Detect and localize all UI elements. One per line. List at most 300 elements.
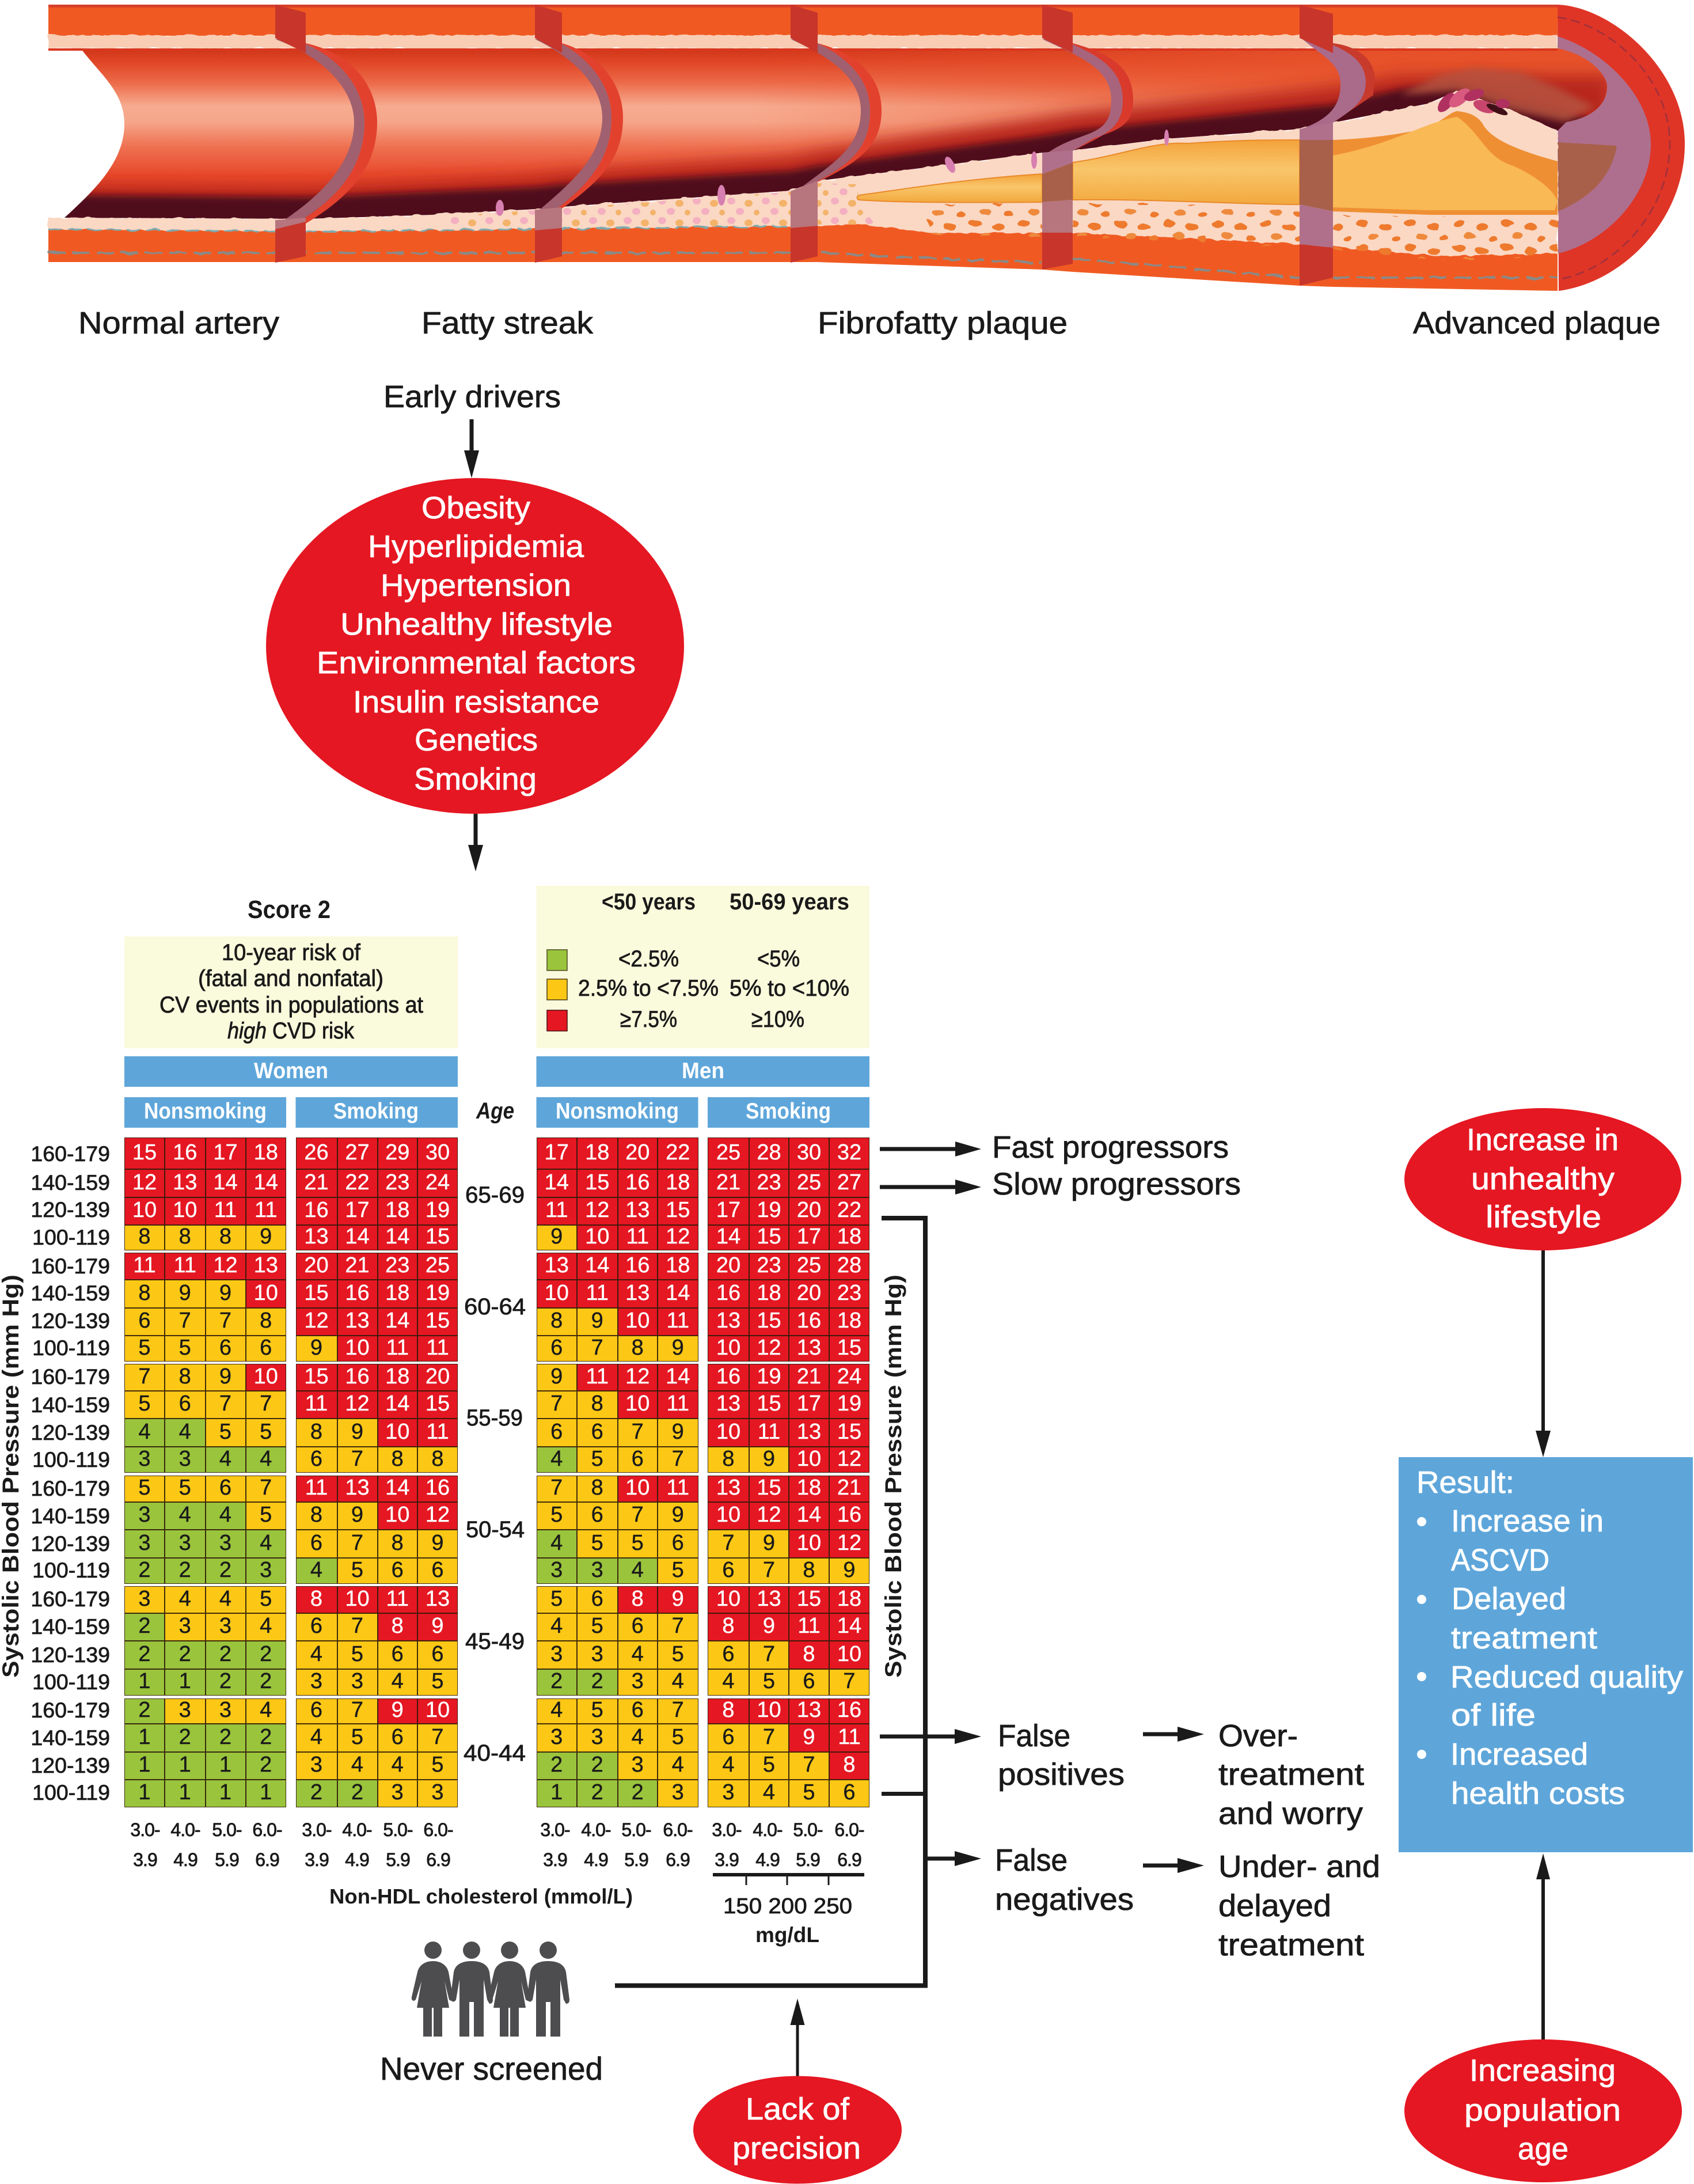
grid: men nonsmoking 65-69: 15: [585, 1170, 609, 1195]
grid: women nonsmoking 50-54: [124, 1476, 286, 1584]
age band labels: 60-64: [464, 1294, 526, 1320]
grid: women nonsmoking 40-44: 3: [219, 1698, 231, 1722]
grid: men smoking 55-59: 15: [837, 1419, 861, 1443]
heading: early drivers: Early drivers: [383, 380, 561, 414]
label: overtreatment and worry: and worry: [1218, 1796, 1363, 1831]
grid: women smoking 40-44: 4: [351, 1753, 363, 1777]
grid: men nonsmoking 40-44: 3: [550, 1724, 563, 1749]
grid: women smoking 40-44: 2: [310, 1780, 322, 1804]
ellipse: early drivers list: Genetics: [415, 723, 538, 757]
grid: women nonsmoking 60-64: 6: [260, 1335, 272, 1359]
grid: men nonsmoking 40-44: 3: [591, 1724, 603, 1749]
grid: men nonsmoking 50-54: 11: [667, 1476, 689, 1500]
grid: women smoking 50-54: 5: [351, 1557, 363, 1582]
grid: men smoking 65-69: 22: [837, 1198, 861, 1222]
header: men nonsmoking: [537, 1097, 698, 1128]
grid: women smoking 40-44: [296, 1698, 458, 1807]
grid: women smoking 60-64: 9: [310, 1335, 322, 1359]
grid: women nonsmoking 50-54: 3: [219, 1531, 231, 1555]
blood pressure row labels: 140-159: [31, 1726, 110, 1750]
grid: men nonsmoking 40-44: 3: [672, 1780, 684, 1804]
grid: women nonsmoking 40-44: 1: [260, 1780, 272, 1804]
grid: men smoking 60-64: 15: [837, 1335, 861, 1359]
grid: men nonsmoking 65-69: [537, 1138, 698, 1250]
grid: men smoking 55-59: 19: [757, 1364, 781, 1388]
ellipse: lack of precision: precision: [732, 2131, 861, 2166]
ellipse: early drivers list: Unhealthy lifestyle: [340, 607, 613, 642]
grid: women nonsmoking 60-64: 5: [138, 1335, 151, 1359]
cholesterol axis labels: 3.9: [715, 1849, 739, 1870]
grid: men nonsmoking 45-49: 3: [550, 1641, 563, 1666]
ellipse: increasing population age: age: [1518, 2132, 1568, 2166]
grid: women smoking 50-54: 6: [431, 1557, 444, 1582]
grid: women smoking 55-59: 14: [385, 1391, 409, 1416]
grid: men smoking 65-69: [708, 1138, 869, 1250]
grid: women smoking 65-69: [296, 1138, 458, 1250]
grid: women smoking 40-44: 6: [392, 1724, 404, 1749]
grid: men smoking 45-49: [708, 1586, 869, 1696]
grid: men smoking 65-69: 27: [837, 1170, 861, 1195]
grid: women nonsmoking 55-59: 4: [260, 1447, 272, 1471]
grid: women smoking 45-49: 11: [386, 1586, 409, 1610]
grid: men smoking 45-49: 15: [797, 1586, 821, 1610]
grid: women smoking 55-59: 10: [385, 1419, 409, 1443]
grid: women nonsmoking 50-54: 2: [219, 1557, 231, 1582]
grid: women nonsmoking 65-69: 14: [254, 1170, 278, 1195]
grid: women nonsmoking 45-49: 2: [219, 1641, 231, 1666]
cholesterol axis labels: [130, 1819, 864, 1870]
label: overtreatment and worry: [1218, 1719, 1364, 1831]
grid: men nonsmoking 50-54: 5: [550, 1503, 563, 1527]
grid: men nonsmoking 50-54: 6: [672, 1531, 684, 1555]
blood pressure row labels: 120-139: [31, 1643, 110, 1667]
grid: women smoking 50-54: 11: [305, 1476, 328, 1500]
grid: women nonsmoking 65-69: 8: [179, 1224, 191, 1249]
grid: men smoking 50-54: 10: [716, 1503, 740, 1527]
grid: men nonsmoking 65-69: 13: [625, 1198, 650, 1222]
grid: women nonsmoking 45-49: 2: [138, 1641, 151, 1666]
grid: men smoking 50-54: 12: [757, 1503, 781, 1527]
grid: men smoking 50-54: [708, 1476, 869, 1584]
grid: men smoking 40-44: 4: [763, 1780, 775, 1804]
grid: women smoking 55-59: [296, 1364, 458, 1473]
artery stage labels: [78, 306, 1661, 340]
grid: women smoking 40-44: 2: [351, 1780, 363, 1804]
grid: women smoking 40-44: 3: [431, 1780, 444, 1804]
grid: women smoking 45-49: [296, 1586, 458, 1696]
grid: women smoking 40-44: 5: [351, 1724, 363, 1749]
grid: women smoking 65-69: 24: [426, 1170, 450, 1195]
grid: men nonsmoking 65-69: 12: [666, 1224, 690, 1249]
grid: women nonsmoking 60-64: 11: [133, 1253, 156, 1277]
ellipse: increasing population age: [1404, 2039, 1682, 2182]
grid: men smoking 60-64: 13: [797, 1335, 821, 1359]
age band labels: 50-54: [466, 1517, 525, 1542]
grid: men smoking 50-54: 16: [837, 1503, 861, 1527]
grid: women nonsmoking 45-49: 1: [138, 1669, 151, 1693]
grid: men nonsmoking 50-54: 6: [591, 1503, 603, 1527]
grid: men smoking 45-49: 14: [837, 1614, 861, 1638]
grid: women nonsmoking 65-69: 11: [255, 1198, 277, 1222]
ellipse: early drivers list: Environmental factors: [317, 646, 636, 680]
grid: women smoking 55-59: 15: [426, 1391, 450, 1416]
grid: women nonsmoking 50-54: 5: [179, 1476, 191, 1500]
grid: women smoking 60-64: 20: [304, 1253, 329, 1277]
grid: men smoking 60-64: 23: [757, 1253, 781, 1277]
grid: men smoking 45-49: 11: [797, 1614, 821, 1638]
grid: women nonsmoking 65-69: 10: [173, 1198, 197, 1222]
blood pressure row labels: 100-119: [32, 1670, 110, 1694]
grid: women smoking 55-59: 9: [351, 1419, 363, 1443]
blood pressure row labels: 160-179: [31, 1587, 110, 1611]
grid: men smoking 65-69: 25: [716, 1140, 740, 1165]
label: under and delayed treatment: [1218, 1849, 1380, 1962]
grid: men nonsmoking 60-64: 18: [666, 1253, 690, 1277]
grid: men smoking 55-59: 8: [722, 1447, 735, 1471]
ellipse: increase in unhealthy lifestyle: [1404, 1108, 1681, 1250]
grid: women smoking 60-64: 13: [345, 1309, 370, 1333]
grid: men nonsmoking 55-59: 5: [591, 1447, 603, 1471]
cholesterol axis labels: 5.0-: [793, 1819, 823, 1840]
grid: women smoking 65-69: 22: [345, 1170, 370, 1195]
grid: women smoking 40-44: 9: [392, 1698, 404, 1722]
grid: men nonsmoking 40-44: 4: [550, 1698, 563, 1722]
age band labels: 65-69: [465, 1182, 525, 1208]
grid: women smoking 60-64: 15: [304, 1281, 329, 1305]
blood pressure row labels: 140-159: [31, 1504, 110, 1528]
grid: women nonsmoking 55-59: 7: [260, 1391, 272, 1416]
grid: men smoking 45-49: 6: [722, 1641, 735, 1666]
label: overtreatment and worry: treatment: [1218, 1757, 1364, 1792]
grid: women smoking 45-49: 3: [351, 1669, 363, 1693]
arrow: false positives: [880, 1729, 981, 1744]
artery lumen: [64, 48, 1607, 219]
grid: women smoking 45-49: 8: [392, 1614, 404, 1638]
bracket connector: [615, 1218, 925, 1986]
grid: men nonsmoking 50-54: 4: [632, 1557, 644, 1582]
grid: men smoking 40-44: 4: [722, 1753, 735, 1777]
panel: colour legend: ≥7.5%: [620, 1007, 677, 1032]
label: under and delayed treatment: treatment: [1218, 1928, 1364, 1962]
arrow: to overtreatment: [1143, 1727, 1204, 1742]
cholesterol axis labels: 5.0-: [621, 1819, 651, 1840]
label: false negatives: False: [995, 1843, 1068, 1878]
grid: women nonsmoking 45-49: 2: [260, 1641, 272, 1666]
grid: men nonsmoking 60-64: 13: [545, 1253, 569, 1277]
grid: women smoking 60-64: 11: [386, 1335, 409, 1359]
grid: women nonsmoking 45-49: 3: [138, 1586, 151, 1610]
blood pressure row labels: 140-159: [31, 1393, 110, 1417]
grid: men smoking 55-59: [708, 1364, 869, 1473]
grid: men nonsmoking 60-64: 14: [585, 1253, 609, 1277]
grid: women nonsmoking 60-64: 11: [174, 1253, 196, 1277]
grid: men nonsmoking 40-44: 2: [591, 1753, 603, 1777]
blood pressure row labels: 120-139: [31, 1531, 110, 1556]
label: under and delayed treatment: Under- and: [1218, 1849, 1380, 1884]
grid: women smoking 40-44: 7: [351, 1698, 363, 1722]
grid: men nonsmoking 55-59: 6: [632, 1447, 644, 1471]
grid: women nonsmoking 50-54: 3: [138, 1531, 151, 1555]
grid: women nonsmoking 55-59: 5: [219, 1419, 231, 1443]
plaque and pale intima: [48, 91, 1558, 260]
grid: women smoking 55-59: 8: [431, 1447, 444, 1471]
grid: men smoking 55-59: 15: [757, 1391, 781, 1416]
grid: men nonsmoking 45-49: 4: [672, 1669, 684, 1693]
cholesterol axis labels: 5.9: [624, 1849, 648, 1870]
grid: men nonsmoking 60-64: 16: [625, 1253, 650, 1277]
grid: women nonsmoking 45-49: 4: [179, 1586, 191, 1610]
ruptured plaque clot: [1434, 85, 1510, 117]
grid: men smoking 60-64: 28: [837, 1253, 861, 1277]
grid: women nonsmoking 65-69: 11: [214, 1198, 237, 1222]
cholesterol axis labels: 6.9: [666, 1849, 690, 1870]
grid: men nonsmoking 45-49: 4: [550, 1614, 563, 1638]
grid: women smoking 50-54: 12: [426, 1503, 450, 1527]
grid: men smoking 40-44: 13: [797, 1698, 821, 1722]
grid: women smoking 65-69: 19: [426, 1198, 450, 1222]
grid: women smoking 50-54: 9: [351, 1503, 363, 1527]
grid: women nonsmoking 65-69: 13: [173, 1170, 197, 1195]
grid: men smoking 60-64: [708, 1253, 869, 1362]
grid: women smoking 45-49: 4: [310, 1641, 322, 1666]
grid: men smoking 60-64: 18: [757, 1281, 781, 1305]
blood pressure row labels: 140-159: [31, 1281, 110, 1305]
cholesterol axis labels: 3.9: [305, 1849, 329, 1870]
grid: men nonsmoking 40-44: 2: [632, 1780, 644, 1804]
grid: women nonsmoking 40-44: 1: [138, 1724, 151, 1749]
grid: women smoking 60-64: 18: [385, 1281, 409, 1305]
grid: men nonsmoking 50-54: 7: [550, 1476, 563, 1500]
grid: women smoking 55-59: 16: [345, 1364, 370, 1388]
cholesterol axis labels: 5.0-: [383, 1819, 413, 1840]
grid: women smoking 65-69: 26: [304, 1140, 329, 1165]
blood pressure row labels: 160-179: [31, 1698, 110, 1722]
grid: women nonsmoking 55-59: 4: [179, 1419, 191, 1443]
grid: men smoking 50-54: 9: [843, 1557, 856, 1582]
grid: men nonsmoking 45-49: 8: [632, 1586, 644, 1610]
grid: men nonsmoking 60-64: 6: [550, 1335, 563, 1359]
panel: result: Result:: [1416, 1465, 1514, 1500]
panel: colour legend: 2.5% to <7.5%: [578, 976, 719, 1001]
grid: men smoking 65-69: 17: [797, 1224, 821, 1249]
blood pressure row labels: 140-159: [31, 1170, 110, 1195]
grid: men smoking 60-64: 12: [757, 1335, 781, 1359]
label: false negatives: negatives: [995, 1882, 1134, 1917]
grid: men nonsmoking 40-44: 5: [672, 1724, 684, 1749]
grid: women nonsmoking 55-59: 6: [179, 1391, 191, 1416]
age band labels: 55-59: [466, 1405, 523, 1431]
grid: women nonsmoking 40-44: 1: [179, 1753, 191, 1777]
grid: men nonsmoking 65-69: 22: [666, 1140, 690, 1165]
ellipse: early drivers list: Hyperlipidemia: [368, 529, 584, 564]
panel: colour legend: <50 years: [602, 889, 696, 915]
grid: women nonsmoking 45-49: 2: [260, 1669, 272, 1693]
header: women smoking: [296, 1097, 458, 1128]
artery stage labels: Fibrofatty plaque: [818, 306, 1068, 340]
grid: men nonsmoking 60-64: 10: [545, 1281, 569, 1305]
artery illustration: [35, 5, 1685, 291]
grid: women nonsmoking 65-69: 17: [213, 1140, 238, 1165]
grid: men nonsmoking 50-54: 5: [632, 1531, 644, 1555]
grid: women nonsmoking 40-44: 1: [219, 1753, 231, 1777]
ellipse: increase in unhealthy lifestyle: lifestyle: [1486, 1200, 1601, 1234]
grid: men nonsmoking 45-49: 6: [632, 1614, 644, 1638]
grid: women nonsmoking 40-44: 1: [138, 1780, 151, 1804]
grid: women nonsmoking 60-64: 9: [179, 1281, 191, 1305]
grid: men nonsmoking 45-49: 7: [672, 1614, 684, 1638]
grid: men nonsmoking 55-59: 7: [672, 1447, 684, 1471]
grid: women nonsmoking 60-64: 6: [138, 1309, 151, 1333]
age band labels: 45-49: [465, 1629, 525, 1654]
arrow: fast progressors: [880, 1142, 981, 1157]
ellipse: early drivers list: Smoking: [414, 762, 537, 797]
grid: men smoking 40-44: 16: [837, 1698, 861, 1722]
grid: women smoking 65-69: 14: [345, 1224, 370, 1249]
grid: women nonsmoking 65-69: 12: [132, 1170, 157, 1195]
grid: men nonsmoking 55-59: 4: [550, 1447, 563, 1471]
grid: women nonsmoking 50-54: 7: [260, 1476, 272, 1500]
grid: men nonsmoking 40-44: 3: [632, 1753, 644, 1777]
cholesterol axis labels: 6.0-: [252, 1819, 282, 1840]
blood pressure row labels: 100-119: [32, 1336, 110, 1360]
grid: women smoking 50-54: [296, 1476, 458, 1584]
grid: women nonsmoking 55-59: 8: [179, 1364, 191, 1388]
grid: women nonsmoking 50-54: 2: [179, 1557, 191, 1582]
grid: women smoking 50-54: 8: [392, 1531, 404, 1555]
mg/dL scale: mg/dL: [755, 1923, 819, 1947]
grid: men nonsmoking 55-59: 11: [586, 1364, 609, 1388]
blood pressure row labels: 100-119: [32, 1558, 110, 1582]
grid: men nonsmoking 60-64: 10: [625, 1309, 650, 1333]
cholesterol axis labels: 4.9: [584, 1849, 608, 1870]
grid: women nonsmoking 45-49: 2: [219, 1669, 231, 1693]
grid: men smoking 50-54: 14: [797, 1503, 821, 1527]
grid: men nonsmoking 50-54: 7: [632, 1503, 644, 1527]
arrow: lifestyle to result: [1536, 1250, 1551, 1457]
grid: men nonsmoking 55-59: [537, 1364, 698, 1473]
grid: women smoking 60-64: 11: [426, 1335, 449, 1359]
grid: women smoking 60-64: 21: [345, 1253, 370, 1277]
grid: men smoking 45-49: 13: [757, 1586, 781, 1610]
grid: women smoking 45-49: 3: [310, 1669, 322, 1693]
grid: men smoking 50-54: 15: [757, 1476, 781, 1500]
grid: men nonsmoking 40-44: 4: [672, 1753, 684, 1777]
grid: men smoking 65-69: 18: [837, 1224, 861, 1249]
blood pressure row labels: 100-119: [32, 1225, 110, 1249]
grid: men nonsmoking 40-44: 4: [632, 1724, 644, 1749]
age band labels: [464, 1182, 526, 1766]
grid: women nonsmoking 60-64: 9: [219, 1281, 231, 1305]
grid: women smoking 40-44: 5: [431, 1753, 444, 1777]
grid: men smoking 45-49: 8: [722, 1614, 735, 1638]
mg/dL scale: [713, 1873, 864, 1947]
panel: risk description: [124, 936, 458, 1048]
grid: women smoking 50-54: 8: [310, 1503, 322, 1527]
axis title: systolic blood pressure right: Systolic Blood Pressure (mm Hg): [881, 1275, 906, 1678]
grid: men smoking 50-54: 18: [797, 1476, 821, 1500]
grid: women smoking 40-44: 7: [431, 1724, 444, 1749]
grid: men nonsmoking 50-54: 8: [591, 1476, 603, 1500]
label: slow progressors: Slow progressors: [992, 1167, 1241, 1201]
grid: women smoking 65-69: 13: [304, 1224, 329, 1249]
grid: women smoking 65-69: 29: [385, 1140, 409, 1165]
header: women nonsmoking: [124, 1097, 286, 1128]
header: women: Women: [254, 1059, 328, 1083]
cholesterol axis labels: 3.0-: [302, 1819, 332, 1840]
grid: men nonsmoking 45-49: 5: [672, 1641, 684, 1666]
grid: women smoking 55-59: 11: [305, 1391, 328, 1416]
grid: women nonsmoking 50-54: 4: [219, 1503, 231, 1527]
grid: women nonsmoking 55-59: [124, 1364, 286, 1473]
top wall: [48, 5, 1558, 50]
grid: men nonsmoking 50-54: 10: [625, 1476, 650, 1500]
grid: men nonsmoking 65-69: 11: [545, 1198, 568, 1222]
panel: result: Reduced quality: [1450, 1660, 1683, 1694]
grid: men nonsmoking 55-59: 10: [625, 1391, 650, 1416]
grid: men nonsmoking 60-64: 13: [625, 1281, 650, 1305]
grid: men nonsmoking 55-59: 9: [672, 1419, 684, 1443]
grid: women smoking 55-59: 12: [345, 1391, 370, 1416]
grid: men nonsmoking 55-59: 12: [625, 1364, 650, 1388]
ellipse: early drivers list: Insulin resistance: [353, 685, 599, 719]
grid: women smoking 50-54: 13: [345, 1476, 370, 1500]
header: age: Age: [476, 1098, 514, 1124]
grid: men nonsmoking 50-54: 9: [672, 1503, 684, 1527]
grid: men nonsmoking 55-59: 8: [591, 1391, 603, 1416]
grid: men smoking 65-69: 23: [757, 1170, 781, 1195]
grid: women smoking 45-49: 6: [310, 1614, 322, 1638]
grid: men smoking 50-54: 13: [716, 1476, 740, 1500]
grid: women smoking 60-64: 10: [345, 1335, 370, 1359]
grid: men nonsmoking 40-44: 2: [591, 1780, 603, 1804]
grid: men nonsmoking 65-69: 14: [545, 1170, 569, 1195]
arrow: slow progressors: [880, 1180, 981, 1195]
grid: women nonsmoking 55-59: 4: [138, 1419, 151, 1443]
grid: men smoking 45-49: 10: [716, 1586, 740, 1610]
arrow: ellipse to chart: [468, 814, 483, 871]
label: false positives: positives: [998, 1757, 1125, 1792]
grid: women nonsmoking 65-69: [124, 1138, 286, 1250]
grid: women nonsmoking 45-49: 4: [260, 1614, 272, 1638]
axis title: non-HDL cholesterol: Non-HDL cholesterol (mmol/L): [329, 1885, 633, 1908]
grid: women nonsmoking 40-44: 2: [219, 1724, 231, 1749]
grid: women smoking 50-54: 7: [351, 1531, 363, 1555]
grid: men nonsmoking 55-59: 14: [666, 1364, 690, 1388]
grid: men nonsmoking 50-54: 4: [550, 1531, 563, 1555]
grid: men smoking 60-64: 18: [837, 1309, 861, 1333]
arrow: false negatives: [926, 1851, 981, 1866]
grid: men smoking 55-59: 24: [837, 1364, 861, 1388]
blood pressure row labels: 160-179: [31, 1476, 110, 1500]
grid: women smoking 55-59: 6: [310, 1447, 322, 1471]
grid: women smoking 50-54: 6: [392, 1557, 404, 1582]
grid: men smoking 55-59: 13: [797, 1419, 821, 1443]
grid: women smoking 45-49: 4: [392, 1669, 404, 1693]
grid: men smoking 55-59: 19: [837, 1391, 861, 1416]
ellipse: increasing population age: population: [1464, 2093, 1621, 2128]
grid: men nonsmoking 45-49: 3: [591, 1641, 603, 1666]
panel: result: Increase in: [1451, 1504, 1604, 1538]
grid: men smoking 55-59: 17: [797, 1391, 821, 1416]
grid: women nonsmoking 60-64: 5: [179, 1335, 191, 1359]
grid: men nonsmoking 60-64: 9: [591, 1309, 603, 1333]
header: women: [124, 1056, 458, 1087]
cholesterol axis labels: 5.9: [386, 1849, 410, 1870]
artery end cap: [1558, 5, 1685, 291]
grid: men nonsmoking 65-69: 17: [545, 1140, 569, 1165]
cholesterol axis labels: 5.0-: [212, 1819, 242, 1840]
grid: men smoking 50-54: 21: [837, 1476, 861, 1500]
